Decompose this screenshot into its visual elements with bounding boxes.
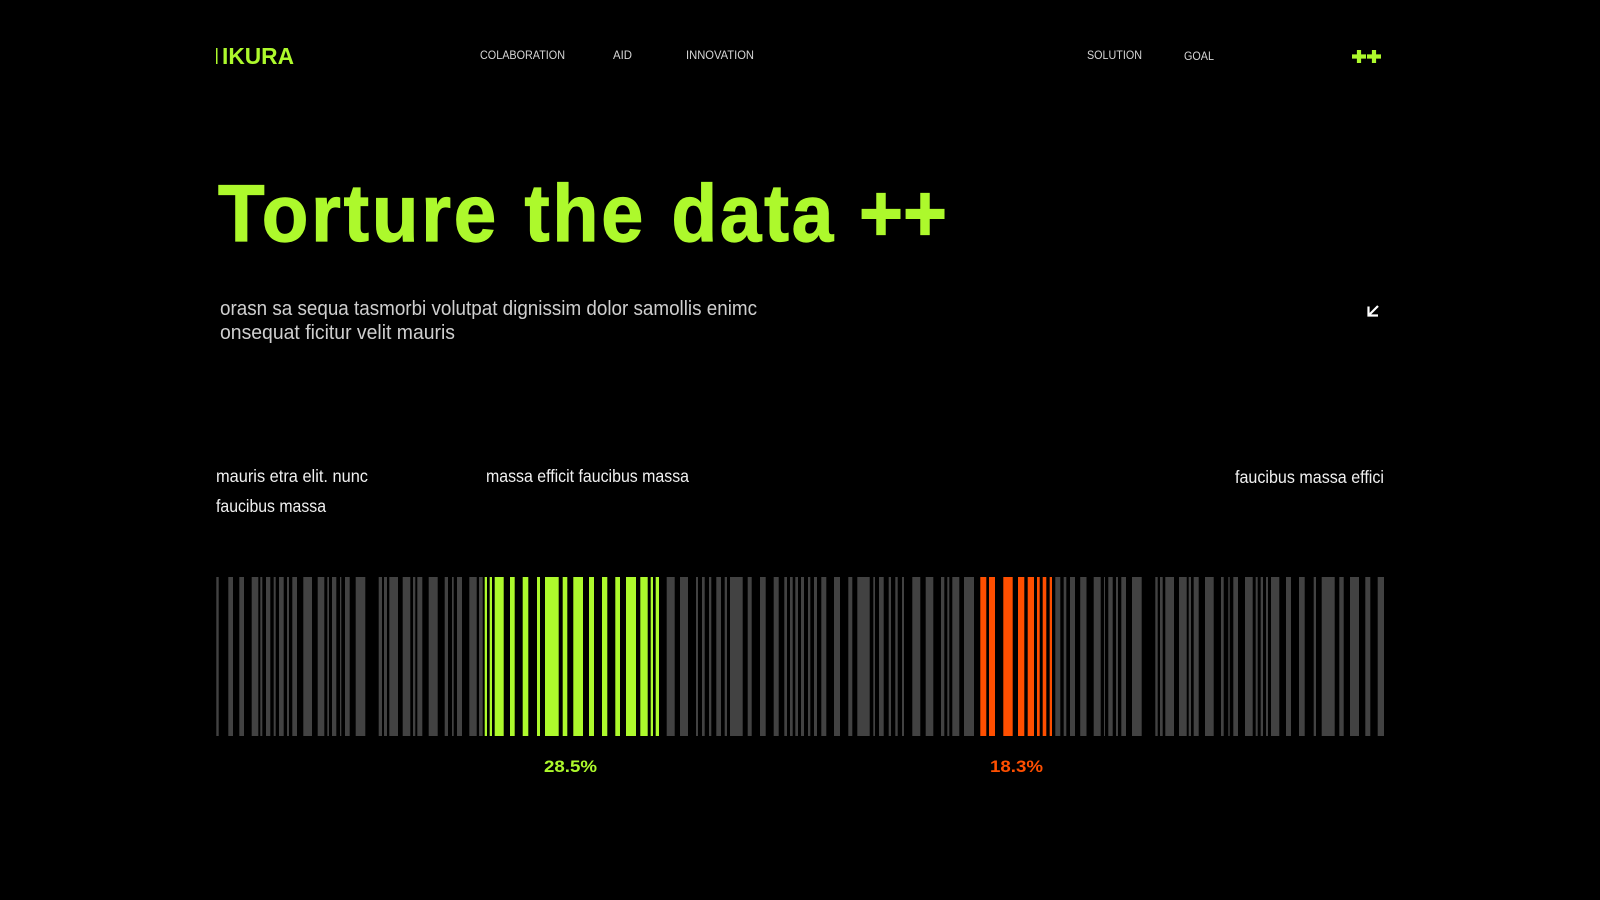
- title: [218, 169, 947, 259]
- navigation: SOLUTION: [1087, 48, 1142, 62]
- label: left: mauris etra elit. nunc: [216, 466, 368, 486]
- label: right: faucibus massa effici: [1235, 467, 1384, 487]
- navigation: AID: [613, 48, 632, 62]
- gray bars: middle: [667, 577, 974, 736]
- navigation: COLABORATION: [480, 48, 565, 62]
- barcode chart: [216, 577, 1384, 736]
- label: left: faucibus massa: [216, 496, 326, 516]
- navigation: [480, 48, 1214, 63]
- title: the: [524, 169, 646, 259]
- gray bars: right: [1055, 577, 1384, 736]
- green bars: 28.5%: [485, 577, 659, 736]
- orange bars: 18.3%: [980, 577, 1052, 736]
- navigation: GOAL: [1184, 49, 1214, 63]
- subtitle text: onsequat ficitur velit mauris: [220, 321, 455, 344]
- label: middle: massa efficit faucibus massa: [486, 466, 689, 486]
- value: 28.5%: 28.5%: [544, 757, 597, 776]
- title: Torture: [218, 169, 499, 259]
- gray bars: left: [216, 577, 483, 736]
- subtitle text: orasn sa sequa tasmorbi volutpat dignissim dolor samollis enimc: [220, 297, 757, 320]
- icon: arrow down-left: [1368, 306, 1378, 316]
- logo: IKURA: [222, 43, 294, 69]
- icon: double plus: [1352, 50, 1381, 63]
- navigation: INNOVATION: [686, 48, 754, 62]
- label: left: [216, 466, 368, 516]
- subtitle text: [220, 297, 757, 344]
- title: data: [672, 169, 836, 259]
- value: 18.3%: 18.3%: [990, 757, 1043, 776]
- title: ++: [859, 169, 947, 259]
